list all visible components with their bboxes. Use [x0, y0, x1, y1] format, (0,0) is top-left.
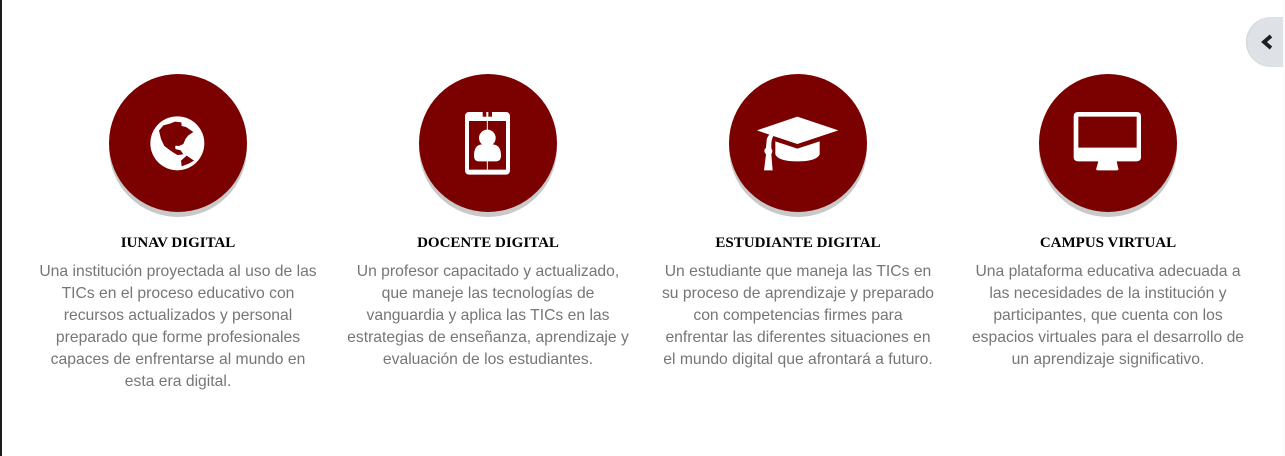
description: espacios virtuales para el desarrollo de	[972, 329, 1244, 346]
description	[39, 263, 317, 390]
description: Una plataforma educativa adecuada a	[975, 263, 1241, 280]
description	[662, 263, 934, 368]
icon: globe	[109, 74, 247, 212]
description	[347, 263, 629, 368]
description: Un estudiante que maneja las TICs en	[665, 263, 931, 280]
heading: CAMPUS VIRTUAL	[1040, 235, 1176, 251]
panel: Estudiante Digital	[662, 74, 934, 368]
panel: Docente Digital	[347, 74, 629, 368]
description: vanguardia y aplica las TICs en las	[366, 307, 610, 324]
description: estrategias de enseñanza, aprendizaje y	[347, 329, 629, 346]
description: TICs en el proceso educativo con	[62, 285, 294, 302]
description: que maneje las tecnologías de	[382, 285, 594, 302]
description: con competencias firmes para	[693, 307, 903, 324]
description: Un profesor capacitado y actualizado,	[357, 263, 619, 280]
collapse tab with chevron	[1246, 17, 1283, 67]
description: esta era digital.	[125, 373, 231, 390]
icon: monitor	[1039, 74, 1177, 212]
description: Una institución proyectada al uso de las	[39, 263, 317, 280]
panel: IUNAV Digital	[39, 74, 317, 390]
description: capaces de enfrentarse al mundo en	[51, 351, 305, 368]
heading: DOCENTE DIGITAL	[417, 235, 559, 251]
heading: ESTUDIANTE DIGITAL	[715, 235, 881, 251]
description: recursos actualizados y personal	[64, 307, 292, 324]
left page edge	[0, 0, 2, 456]
description: un aprendizaje significativo.	[1012, 351, 1204, 368]
description: su proceso de aprendizaje y preparado	[662, 285, 934, 302]
description: preparado que forme profesionales	[56, 329, 300, 346]
icon: id badge	[419, 74, 557, 212]
description: evaluación de los estudiantes.	[383, 351, 593, 368]
description: el mundo digital que afrontará a futuro.	[663, 351, 933, 368]
description: las necesidades de la institución y	[989, 285, 1227, 302]
icon: graduation cap	[729, 74, 867, 212]
heading: IUNAV DIGITAL	[121, 235, 235, 251]
description: participantes, que cuenta con los	[993, 307, 1223, 324]
panel: Campus Virtual	[972, 74, 1244, 368]
description: enfrentar las diferentes situaciones en	[665, 329, 931, 346]
description	[972, 263, 1244, 368]
